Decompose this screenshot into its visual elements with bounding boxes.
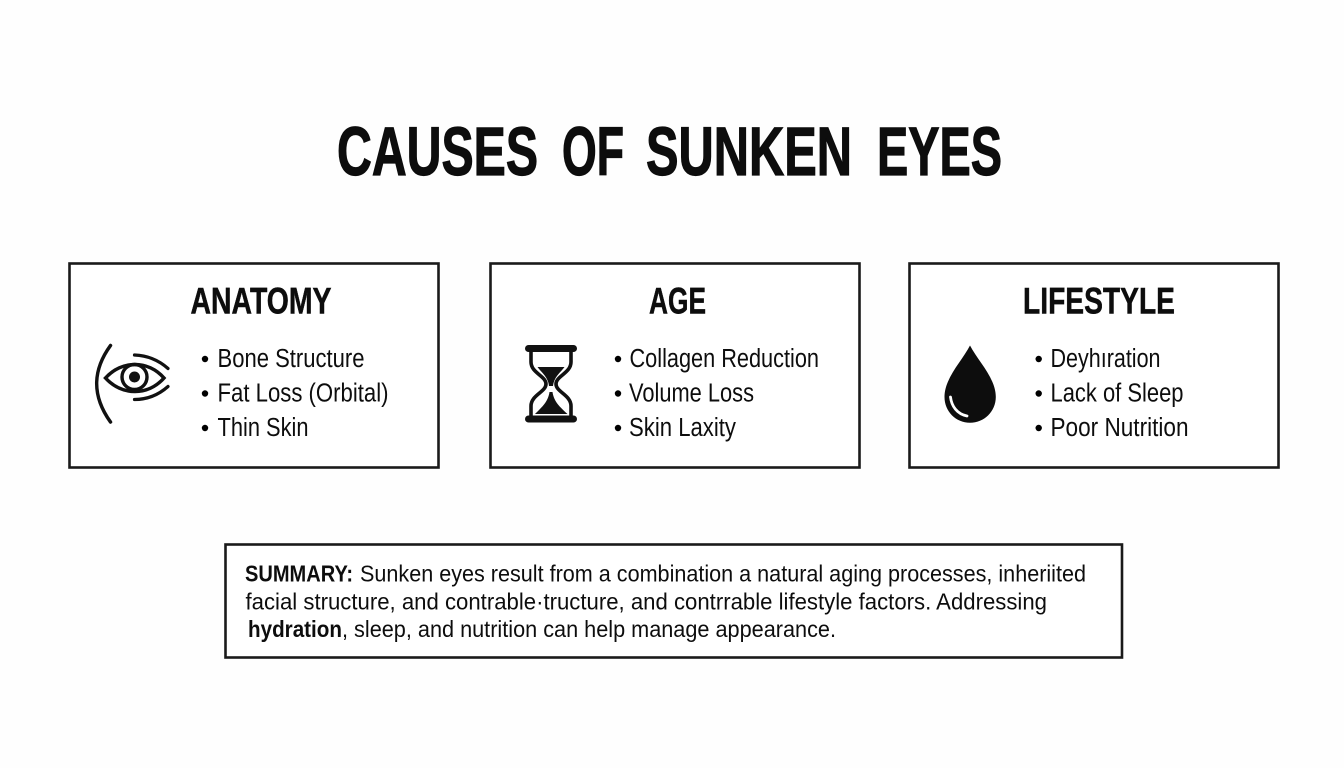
heading: anatomy: ANATOMY — [190, 280, 332, 322]
title: EYES — [877, 113, 1002, 190]
summary text: Sunken eyes result from a combination a natural aging processes, inheriited — [360, 560, 1086, 586]
panel: summary — [226, 544, 1122, 658]
heading: age: AGE — [649, 280, 706, 322]
list: age causes: Volume Loss — [629, 380, 754, 408]
summary text: facial structure, and contrable·tructure, and contrrable lifestyle factors. Addressing — [246, 588, 1047, 614]
icon: water drop — [944, 346, 996, 423]
list: anatomy causes: Thin Skin — [218, 414, 308, 442]
heading: lifestyle: LIFESTYLE — [1023, 280, 1175, 322]
list: anatomy causes: Fat Loss (Orbital) — [218, 380, 388, 408]
list: anatomy causes — [202, 345, 388, 442]
title: SUNKEN — [646, 113, 852, 190]
list: age causes — [615, 345, 819, 442]
title: OF — [562, 113, 624, 190]
panel: anatomy — [70, 264, 438, 468]
summary text: hydration — [248, 616, 342, 642]
summary text — [245, 560, 1086, 642]
title — [337, 113, 1002, 190]
list: age causes: Skin Laxity — [629, 414, 736, 442]
icon: eye — [97, 346, 168, 422]
list: lifestyle causes — [1036, 345, 1188, 442]
list: lifestyle causes: Deyhıration — [1050, 345, 1160, 373]
list: lifestyle causes: Poor Nutrition — [1050, 414, 1188, 442]
list: lifestyle causes: Lack of Sleep — [1050, 380, 1184, 408]
list: age causes: Collagen Reduction — [630, 345, 819, 373]
panel: lifestyle — [910, 264, 1278, 468]
title: CAUSES — [337, 113, 538, 190]
summary text: SUMMARY: — [245, 560, 353, 586]
list: anatomy causes: Bone Structure — [218, 345, 364, 373]
summary text: , sleep, and nutrition can help manage appearance. — [342, 616, 836, 642]
icon: hourglass — [525, 345, 577, 422]
panel: age — [490, 264, 860, 468]
